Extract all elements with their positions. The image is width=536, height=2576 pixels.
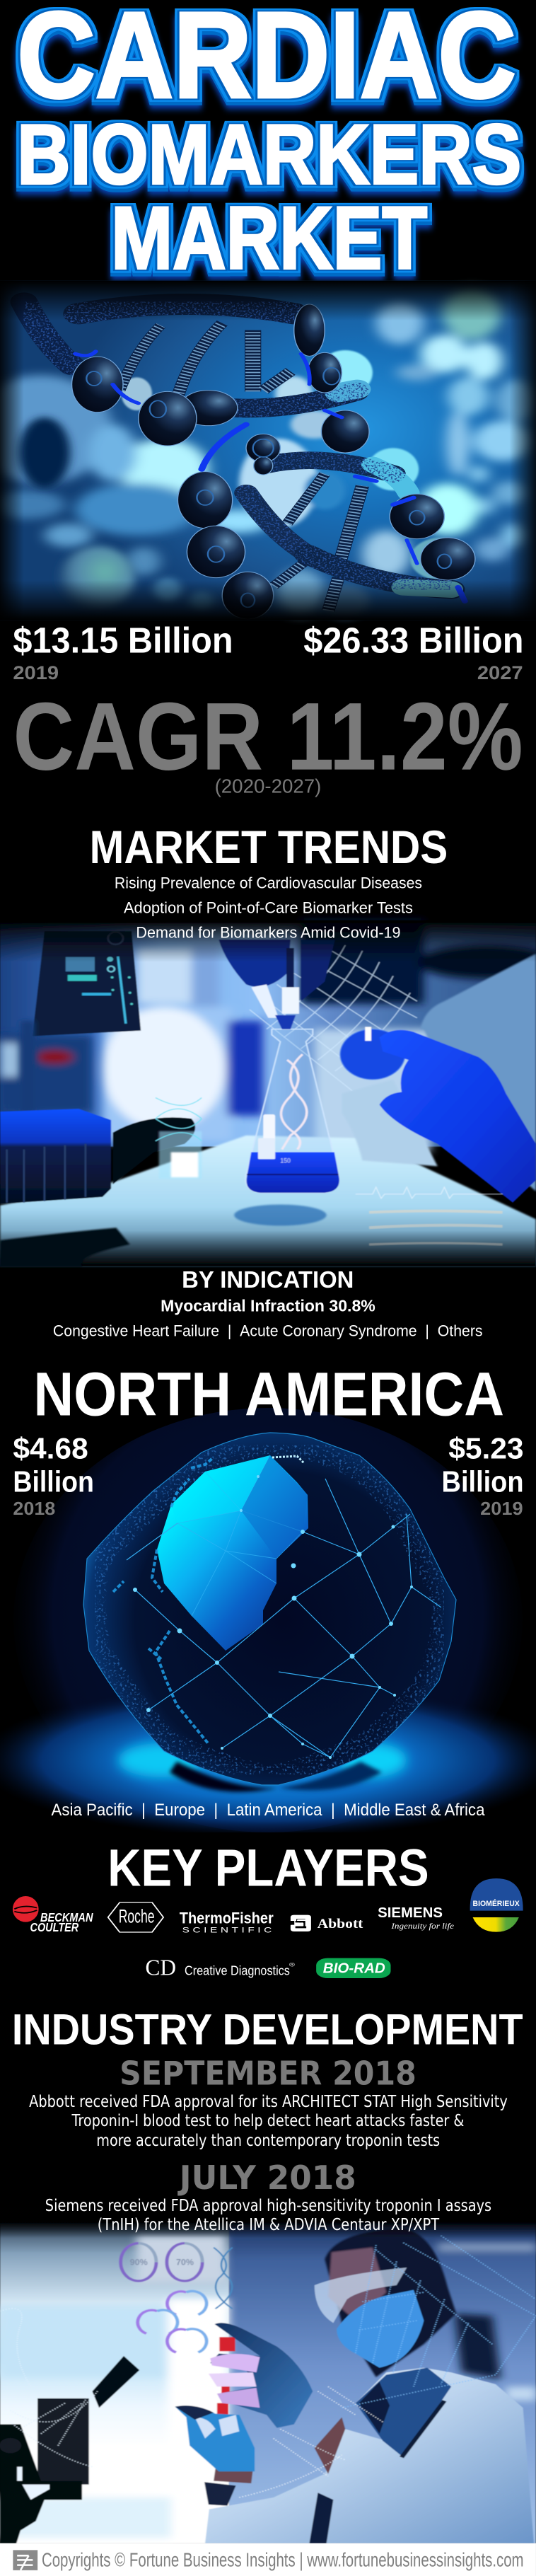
September 2018 (29, 2055, 508, 2150)
logo: Siemens (378, 1905, 454, 1931)
logo: Bio-Rad: BIO-RAD (323, 1960, 385, 1976)
company logos (13, 1878, 523, 1980)
forearm and wrist (315, 2418, 345, 2474)
logo: Siemens: Ingenuity for life (391, 1922, 454, 1931)
logo: Creative Diagnostics: ® (289, 1962, 295, 1968)
lab coat (205, 2368, 534, 2543)
2018 value (13, 1432, 94, 1519)
holographic DNA column (156, 1097, 202, 1179)
logo: Creative Diagnostics: Creative Diagnostics (185, 1963, 290, 1978)
July 2018: (TnIH) for the Atellica IM & ADVIA Centaur XP/XPT (98, 2216, 440, 2234)
heading: north america (13, 1361, 524, 1519)
monitor (33, 931, 141, 1036)
logo: Thermo Fisher Scientific: SCIENTIFIC (182, 1926, 272, 1934)
gloved hand holding tube (175, 2323, 313, 2471)
by indication (53, 1266, 483, 1339)
logo: bioMerieux (470, 1878, 523, 1932)
logo: Beckman Coulter (13, 1896, 93, 1934)
globe (83, 1433, 456, 1785)
by indication: BY INDICATION (182, 1266, 354, 1293)
2019 value (13, 620, 233, 683)
flask DNA helix (281, 1054, 307, 1150)
July 2018: JULY 2018 (177, 2159, 356, 2197)
logo: Beckman Coulter: BECKMAN (40, 1910, 93, 1924)
2018 value: 2018 (13, 1498, 55, 1519)
heading: market trends (90, 821, 448, 942)
trend list: Rising Prevalence of Cardiovascular Diseases (115, 875, 422, 892)
logo: Beckman Coulter: COULTER (30, 1920, 78, 1934)
flask: 150 (280, 1157, 291, 1165)
July 2018: Siemens received FDA approval high-sensitivity troponin I assays (45, 2197, 491, 2215)
CAGR: (2020-2027) (215, 775, 321, 797)
heading: industry development (12, 2005, 523, 2234)
electric blue filaments (75, 352, 465, 601)
title (17, 0, 521, 287)
bead eyes (86, 368, 451, 607)
ECG hologram (356, 1187, 503, 1244)
woman hair and head (325, 2229, 456, 2377)
test tubes (0, 1109, 195, 1204)
globe backdrop glow (0, 1408, 536, 1832)
right dark hair mass (455, 2314, 501, 2379)
network nodes (133, 1475, 413, 1759)
logo: Abbott: Abbott (317, 1917, 363, 1931)
network lines (127, 1479, 441, 1757)
2019 value: 2019 (13, 663, 59, 683)
2018 value: Billion (13, 1465, 94, 1498)
July 2018 (45, 2159, 491, 2234)
2027 value (303, 620, 524, 683)
surgical mask (337, 2290, 424, 2368)
bead chains (24, 302, 451, 589)
continent (157, 1455, 308, 1651)
logo: Thermo Fisher Scientific: ThermoFisher (180, 1909, 274, 1927)
flask (245, 1015, 339, 1193)
speckled rim (95, 1445, 444, 1774)
goggles (315, 2268, 407, 2323)
September 2018: Troponin-I blood test to help detect heart attacks faster & (71, 2112, 464, 2130)
logo: Roche: Roche (119, 1906, 154, 1927)
trend list: Adoption of Point-of-Care Biomarker Tests (124, 900, 413, 917)
ladder rungs (120, 323, 362, 611)
by indication: Myocardial Infraction 30.8% (161, 1297, 375, 1315)
trend list: Demand for Biomarkers Amid Covid-19 (136, 925, 401, 942)
logo: Bio-Rad (316, 1958, 391, 1978)
large blue glove (380, 1030, 536, 1203)
gauge labels (130, 2258, 194, 2268)
dotted DNA mesh (0, 2236, 536, 2497)
gauge labels: 90% (130, 2258, 148, 2268)
coastline fragments (113, 1457, 214, 1744)
heading: industry development: INDUSTRY DEVELOPMENT (12, 2005, 523, 2054)
trend list (115, 875, 422, 942)
scientist photo (0, 2222, 536, 2543)
logo: Creative Diagnostics: CD (145, 1956, 176, 1980)
footer (0, 2543, 536, 2576)
gauge labels: 70% (176, 2258, 194, 2268)
market size figures (13, 620, 524, 797)
2018 value: $4.68 (13, 1432, 88, 1465)
table (0, 1136, 536, 1266)
logo: Creative Diagnostics (145, 1956, 295, 1980)
2019 value: $13.15 Billion (13, 620, 233, 661)
petri dish (340, 1027, 405, 1080)
chain texture (24, 302, 451, 589)
logo: Siemens: SIEMENS (378, 1905, 443, 1921)
other regions (52, 1800, 485, 1897)
coat and sleeve (421, 954, 536, 1191)
footer logo (13, 2550, 37, 2570)
lab photo: market trends background (0, 920, 536, 1266)
gauges (121, 2243, 233, 2352)
mesh hologram (250, 945, 417, 1091)
microscope (0, 2356, 139, 2543)
logo: Roche (108, 1902, 163, 1932)
logo: Thermo Fisher Scientific (180, 1909, 274, 1934)
DNA hero image (0, 281, 536, 620)
logo: Abbott (291, 1916, 363, 1931)
upper gloved hand and pipette (219, 940, 335, 1018)
2019 value (442, 1432, 524, 1519)
dark glass beads (72, 304, 475, 619)
September 2018: more accurately than contemporary troponin tests (96, 2132, 440, 2150)
September 2018: SEPTEMBER 2018 (120, 2055, 416, 2093)
